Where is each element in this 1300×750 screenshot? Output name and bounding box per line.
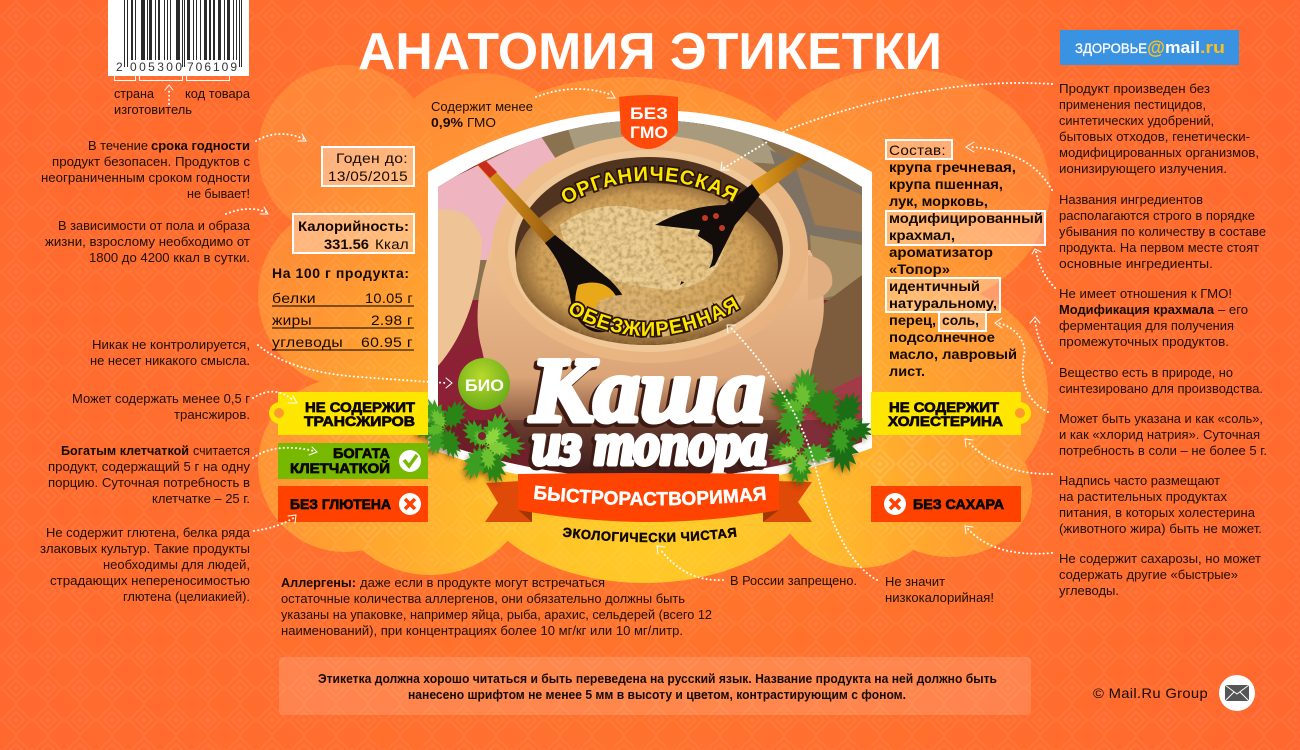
- nutrition table: 2.98 г: [371, 312, 413, 328]
- arrow: sugar: [965, 526, 1052, 554]
- tag: gluten free: [278, 486, 428, 522]
- rim: [492, 135, 808, 363]
- note: low fat: [885, 574, 994, 605]
- note: salt: и как «хлорид натрия». Суточная: [1059, 427, 1260, 442]
- note: trans fats: трансжиров.: [174, 407, 250, 422]
- note: sugar: содержать другие «быстрые»: [1059, 567, 1238, 582]
- note: organic: применения пестицидов,: [1059, 97, 1206, 112]
- note: sugar: углеводы.: [1059, 583, 1119, 598]
- arrow: fibre: [253, 447, 317, 458]
- note: modified starch: Не имеет отношения к ГМО!: [1059, 286, 1232, 301]
- dotted arrows: [165, 83, 1055, 580]
- arrow: bio: [258, 345, 452, 388]
- barcode: 005300: [130, 60, 182, 74]
- note: gluten: злаковых культур. Такие продукты: [40, 541, 250, 556]
- note: cholesterol: Надпись часто размещают: [1059, 473, 1220, 488]
- right spoon: [654, 150, 812, 285]
- note: salt: потребность в соли – не более 5 г.: [1059, 443, 1267, 458]
- ingredients list: «Топор»: [889, 261, 950, 277]
- note: calories: жизни, взрослому необходимо от: [45, 234, 250, 249]
- ingredients list: крупа гречневая,: [889, 159, 1016, 175]
- note: gluten: глютена (целиакией).: [123, 589, 250, 604]
- note: salt: Может быть указана и как «соль»,: [1059, 411, 1263, 426]
- expiry date box: [322, 147, 414, 186]
- note: modified starch: – его: [1218, 302, 1248, 317]
- barcode: 2: [116, 60, 123, 74]
- icon: bio badge: [458, 358, 510, 410]
- tag: gluten free: БЕЗ ГЛЮТЕНА: [290, 496, 391, 512]
- note: shelf life: В течение: [88, 138, 148, 153]
- arrow: shelf life: [256, 134, 306, 141]
- nutrition table: [272, 265, 414, 350]
- bottom callout: [279, 657, 1031, 715]
- tag: no trans fats: [269, 392, 428, 435]
- arrow: cholesterol: [965, 439, 1052, 474]
- copyright: © Mail.Ru Group: [1093, 685, 1208, 701]
- parsley left: [412, 394, 526, 488]
- note: modified starch: промежуточных продуктов.: [1059, 334, 1229, 349]
- note: cholesterol: [1059, 473, 1262, 536]
- product name: Каша из топора: [526, 339, 767, 480]
- nutrition table: белки: [272, 290, 316, 306]
- note: organic: бытовых отходов, генетически-: [1059, 129, 1250, 144]
- note: fibre: Богатым клетчаткой: [61, 443, 189, 458]
- note: gluten: страдающих непереносимостью: [50, 573, 250, 588]
- calories box: Ккал: [375, 236, 409, 252]
- arrow: gluten: [254, 515, 296, 531]
- ingredients list: [886, 140, 1045, 379]
- note: cholesterol: на растительных продуктах: [1059, 489, 1228, 504]
- arrow: salt: [995, 318, 1048, 412]
- note: eco banned: В России запрещено.: [730, 573, 857, 588]
- note: calories: В зависимости от пола и образа: [58, 218, 251, 233]
- note: fibre: считается: [193, 443, 250, 458]
- note: ingredient order: убывания по количеству в составе: [1059, 224, 1266, 239]
- logo: Здоровье@mail.ru: [1060, 30, 1239, 65]
- note: modified starch: [1059, 286, 1248, 349]
- calories box: 331.56: [324, 236, 369, 252]
- note: fibre: [48, 443, 250, 506]
- ribbon: БЫСТРОРАСТВОРИМАЯ: [534, 486, 766, 506]
- logo: Здоровье@mail.ru: mail: [1165, 38, 1200, 57]
- tag: rich in fibre: БОГАТА: [333, 445, 390, 461]
- tag: rich in fibre: [278, 443, 428, 479]
- icon: bio badge: БИО: [465, 376, 504, 395]
- note: cholesterol: питания, в которых холестерина: [1059, 505, 1256, 520]
- pot body: [478, 250, 824, 480]
- nutrition table: углеводы: [272, 334, 343, 350]
- ingredients list: соль,: [942, 312, 979, 328]
- note: fibre: порцию. Суточная потребность в: [48, 475, 250, 490]
- note: cholesterol: (животного жира) быть не может.: [1059, 521, 1262, 536]
- logo: Здоровье@mail.ru: @: [1147, 38, 1165, 59]
- ingredients list: лук, морковь,: [889, 193, 988, 209]
- badge: без ГМО: [619, 95, 678, 149]
- arrow: starch: [1032, 249, 1055, 288]
- note: calories: [45, 218, 251, 265]
- note: low fat: низкокалорийная!: [885, 590, 994, 605]
- note: allergens: наименований), при концентрациях более 10 мг/кг или 10 мг/литр.: [281, 623, 683, 638]
- note: shelf life: срока годности: [151, 138, 250, 153]
- arrow: trans fats: [253, 392, 297, 403]
- note: ingredient order: основные ингредиенты.: [1059, 256, 1213, 271]
- note: sugar: Не содержит сахарозы, но может: [1059, 551, 1261, 566]
- ingredients list: натуральному,: [889, 295, 997, 311]
- central yellow cloud panel: [258, 65, 1050, 583]
- GMO note: ГМО: [467, 115, 496, 130]
- note: trans fats: [72, 391, 250, 422]
- icon: envelope: [1219, 675, 1255, 711]
- arrow: GMO: [536, 89, 615, 98]
- note: organic: [1059, 81, 1259, 176]
- ingredients list: ароматизатор: [889, 244, 993, 260]
- ingredients list: подсолнечное: [889, 329, 995, 345]
- tag: no cholesterol: [871, 392, 1031, 435]
- barcode: [108, 0, 249, 80]
- title: АНАТОМИЯ ЭТИКЕТКИ: [358, 23, 942, 81]
- note: allergens: Аллергены:: [281, 575, 356, 590]
- note: ingredient order: [1059, 192, 1266, 271]
- parsley right: [765, 368, 876, 486]
- arrow: natural: [1030, 317, 1052, 363]
- porridge: [516, 183, 778, 345]
- dark shade under title: [442, 420, 862, 474]
- ingredients list: перец,: [889, 312, 936, 328]
- pot handle: [808, 255, 832, 300]
- ingredients list: крупа пшенная,: [889, 176, 1003, 192]
- curved text: обезжиренная: ОБЕЗЖИРЕННАЯ: [568, 294, 742, 338]
- note: identical to natural: Вещество есть в природе, но: [1059, 365, 1233, 380]
- badge: без ГМО: ГМО: [630, 123, 668, 142]
- barcode captions: страна: [114, 86, 155, 101]
- product name: Каша из топора: из топора: [529, 414, 764, 480]
- nutrition table: 10.05 г: [365, 290, 413, 306]
- note: shelf life: неограниченным сроком годности: [41, 170, 250, 185]
- note: modified starch: ферментация для получения: [1059, 318, 1234, 333]
- tag: no cholesterol: ХОЛЕСТЕРИНА: [888, 413, 1003, 429]
- expiry date box: 13/05/2015: [328, 168, 408, 184]
- note: identical to natural: синтезировано для производства.: [1059, 381, 1263, 396]
- note: allergens: [281, 575, 712, 638]
- note: bio mark: Никак не контролируется,: [92, 337, 250, 352]
- product name: Каша из топора: Каша: [526, 342, 762, 444]
- note: allergens: указаны на упаковке, например яйца, рыба, арахис, сельдерей (всего 12: [281, 607, 712, 622]
- photo backdrop: [438, 121, 862, 474]
- left spoon: [473, 155, 745, 338]
- note: bio mark: не несет никакого смысла.: [90, 353, 250, 368]
- arrow: barcode: [165, 85, 173, 104]
- calories box: [293, 214, 414, 253]
- barcode: 706109: [187, 60, 237, 74]
- bottom callout: Этикетка должна хорошо читаться и быть переведена на русский язык. Название продукта на ней должно быть: [318, 671, 997, 686]
- tag: no cholesterol: НЕ СОДЕРЖИТ: [889, 399, 999, 415]
- GMO note: 0,9%: [431, 115, 463, 130]
- tag: sugar free: [871, 486, 1021, 522]
- note: shelf life: [41, 138, 251, 201]
- ingredients list: модифицированный: [889, 210, 1043, 226]
- logo: Здоровье@mail.ru: ЗДОРОВЬЕ: [1075, 41, 1147, 56]
- curved text: экологически чистая: ЭКОЛОГИЧЕСКИ ЧИСТАЯ: [562, 528, 737, 542]
- note: identical to natural: [1059, 365, 1263, 396]
- note: bio mark: [90, 337, 250, 368]
- note: trans fats: Может содержать менее 0,5 г: [72, 391, 250, 406]
- arrow: ingredients: [966, 142, 1052, 190]
- nutrition table: На 100 г продукта:: [272, 265, 409, 281]
- note: low fat: Не значит: [885, 574, 945, 589]
- badge: без ГМО: БЕЗ: [630, 104, 668, 123]
- product name: Каша из топора: из топора: [532, 411, 767, 477]
- barcode captions: код товара: [185, 86, 251, 101]
- nutrition table: 60.95 г: [361, 334, 413, 350]
- note: fibre: клетчатке – 25 г.: [152, 491, 250, 506]
- arrow: organic: [721, 83, 1052, 170]
- product name: Каша из топора: Каша: [529, 339, 765, 441]
- tag: no trans fats: ТРАНСЖИРОВ: [304, 413, 415, 429]
- lid: [438, 209, 482, 366]
- note: gluten: Не содержит глютена, белка ряда: [46, 525, 251, 540]
- note: organic: ионизирующего излучения.: [1059, 161, 1227, 176]
- porridge mound: [560, 206, 725, 290]
- note: gluten: [40, 525, 251, 604]
- photo frame with pot: [428, 100, 872, 500]
- barcode captions: изготовитель: [114, 102, 192, 117]
- note: calories: 1800 до 4200 ккал в сутки.: [89, 250, 250, 265]
- logo: Здоровье@mail.ru: .ru: [1200, 38, 1225, 57]
- note: fibre: продукт, содержащий 5 г на одну: [48, 459, 250, 474]
- ingredients list: масло, лавровый: [889, 346, 1017, 362]
- bottom callout: нанесено шрифтом не менее 5 мм в высоту и цветом, контрастирующим с фоном.: [408, 687, 906, 702]
- ingredients list: идентичный: [889, 278, 980, 294]
- expiry date box: Годен до:: [336, 150, 408, 166]
- note: shelf life: не бывает!: [187, 186, 250, 201]
- note: organic: синтетических удобрений,: [1059, 113, 1214, 128]
- ingredients list: Состав:: [889, 142, 946, 158]
- ribbon: [485, 473, 812, 522]
- note: salt: [1059, 411, 1267, 458]
- barcode captions: [114, 86, 251, 117]
- note: gluten: необходимы для людей,: [103, 557, 250, 572]
- note: allergens: остаточные количества аллергенов, они обязательно должны быть: [281, 591, 685, 606]
- tag: no trans fats: НЕ СОДЕРЖИТ: [305, 399, 415, 415]
- GMO note: [431, 99, 533, 130]
- note: modified starch: Модификация крахмала: [1059, 302, 1215, 317]
- curved text: органическая: ОРГАНИЧЕСКАЯ: [560, 164, 740, 204]
- note: organic: модифицированных организмов,: [1059, 145, 1259, 160]
- note: sugar: [1059, 551, 1261, 598]
- note: ingredient order: продукта. На первом месте стоят: [1059, 240, 1259, 255]
- GMO note: Содержит менее: [431, 99, 533, 114]
- calories box: Калорийность:: [298, 218, 409, 234]
- nutrition table: жиры: [272, 312, 312, 328]
- note: organic: Продукт произведен без: [1059, 81, 1210, 96]
- ingredients list: крахмал,: [889, 227, 955, 243]
- note: allergens: даже если в продукте могут встречаться: [360, 575, 605, 590]
- note: ingredient order: Названия ингредиентов: [1059, 192, 1203, 207]
- arrow: low fat: [727, 325, 877, 580]
- arrow: eco: [657, 546, 723, 580]
- arrow: calories: [226, 207, 268, 214]
- tag: rich in fibre: КЛЕТЧАТКОЙ: [290, 459, 390, 476]
- tag: sugar free: БЕЗ САХАРА: [913, 496, 1004, 512]
- note: shelf life: продукт безопасен. Продуктов с: [52, 154, 251, 169]
- ingredients list: лист.: [889, 363, 925, 379]
- note: ingredient order: располагаются строго в порядке: [1059, 208, 1255, 223]
